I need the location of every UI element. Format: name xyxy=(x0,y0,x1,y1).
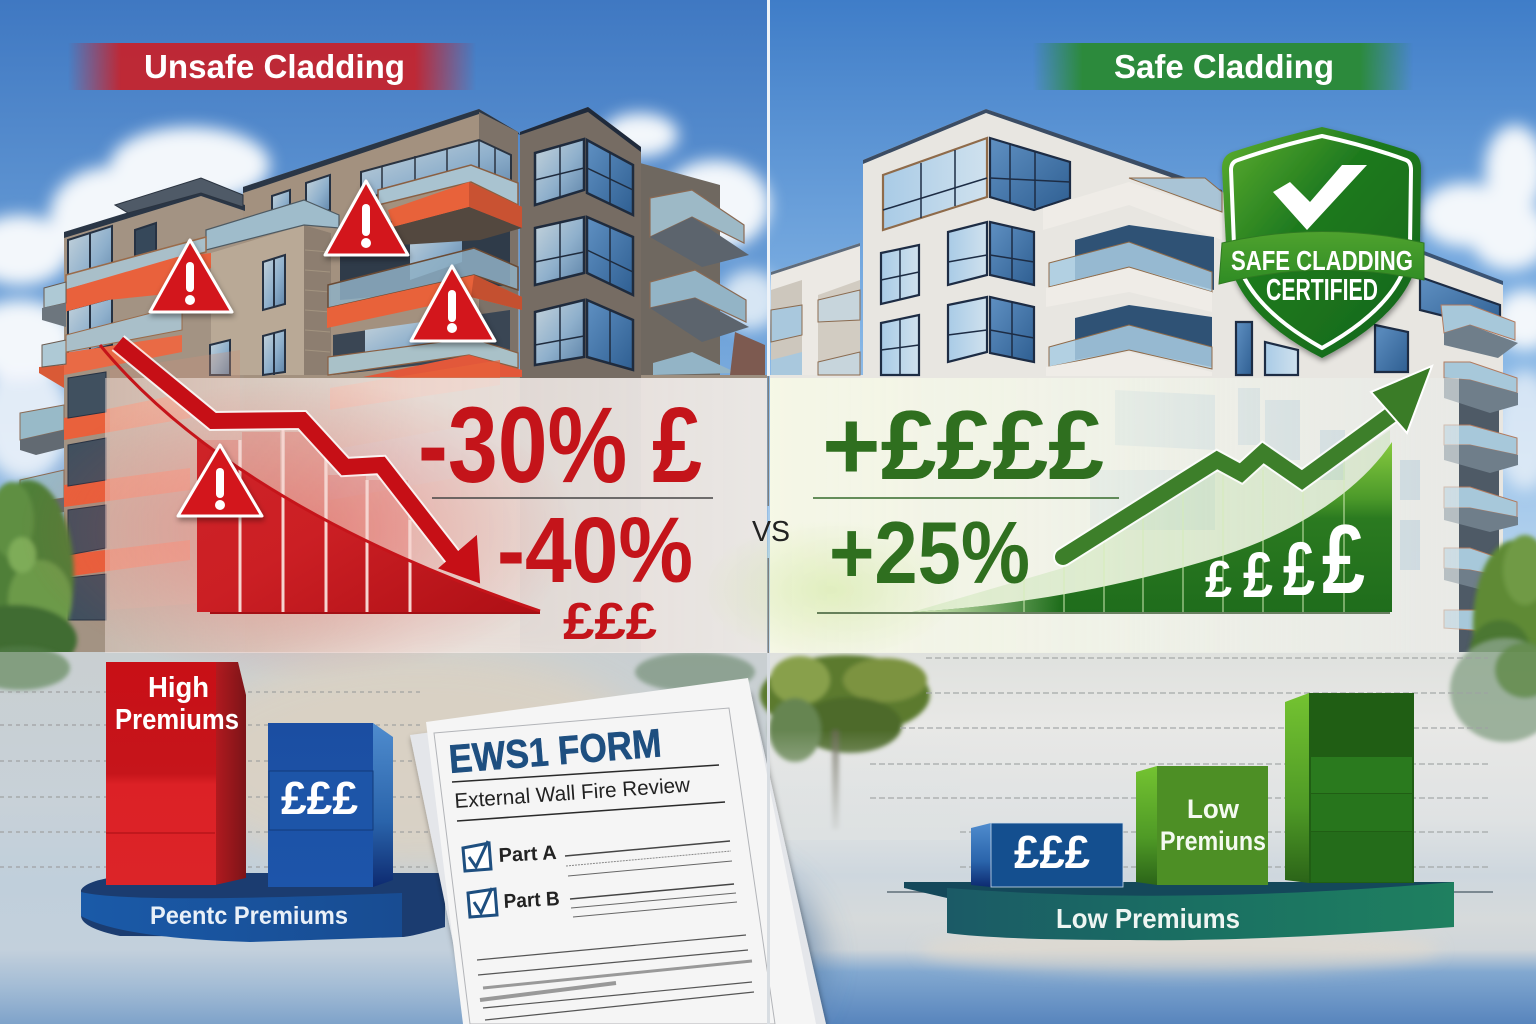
warning icon 4 xyxy=(178,445,262,516)
right dark wall xyxy=(520,107,641,653)
clouds right xyxy=(1420,125,1536,490)
left wing xyxy=(771,243,860,375)
safe building xyxy=(770,109,1518,653)
warning icon 1 xyxy=(150,240,232,312)
ground floor wall behind panel xyxy=(64,375,767,653)
far right balconies xyxy=(1441,305,1518,653)
far right balconies xyxy=(640,163,765,375)
comparison divider bottom xyxy=(767,652,770,1024)
tree: far right xyxy=(1470,535,1536,710)
panel: property value left xyxy=(20,343,767,680)
fine print lines xyxy=(477,935,754,1020)
chart label: ££££: £ xyxy=(1243,539,1273,611)
fog ground right xyxy=(770,652,1536,1024)
red bar: High xyxy=(148,672,209,704)
tree: far left xyxy=(0,480,77,675)
bar chart: low premiums xyxy=(904,693,1454,940)
form heading: EWS1 FORM xyxy=(447,721,663,782)
stat: -30% £: -30% £ xyxy=(418,384,702,505)
chart gridlines left xyxy=(0,692,430,867)
document: EWS1 form xyxy=(410,678,826,1024)
badge: safe cladding certified: SAFE CLADDING xyxy=(1231,245,1413,276)
checklist: part B: Part B xyxy=(503,888,560,913)
center windows xyxy=(361,140,511,200)
fog over right tree xyxy=(770,730,960,840)
left wing wall xyxy=(64,193,245,653)
checklist: part A: Part A xyxy=(498,842,557,867)
vs divider: VS xyxy=(752,516,790,548)
section heading: unsafe cladding: Unsafe Cladding xyxy=(144,48,405,85)
blue bar: £££ xyxy=(1014,826,1090,878)
unsafe building xyxy=(20,107,767,653)
back sheet xyxy=(410,690,826,1024)
section heading: safe cladding: Safe Cladding xyxy=(1114,48,1334,85)
red bar: Premiums xyxy=(115,704,239,736)
tree: center right xyxy=(760,655,930,830)
section heading: unsafe cladding xyxy=(68,43,476,90)
chart label: ££££ xyxy=(1205,504,1365,614)
stat: +££££: +££££ xyxy=(822,390,1104,500)
wing windows xyxy=(68,175,330,375)
shield xyxy=(1222,127,1421,358)
balconies xyxy=(1043,182,1222,240)
badge: safe cladding certified: CERTIFIED xyxy=(1266,272,1378,307)
light strip wall xyxy=(211,225,331,375)
checklist: part A xyxy=(463,841,732,876)
badge: safe cladding certified xyxy=(1219,127,1424,358)
clouds left xyxy=(0,113,780,480)
right sky background xyxy=(768,0,1536,660)
warning icon 3 xyxy=(411,266,495,341)
main white wall xyxy=(770,109,1503,653)
stat: £££: £££ xyxy=(563,593,657,651)
chart label: ££££: £ xyxy=(1322,504,1365,614)
platform xyxy=(904,882,1454,940)
beige haze left xyxy=(180,650,660,870)
left sky background xyxy=(0,0,768,660)
stat: -40%: -40% xyxy=(497,498,693,602)
value drop: bar and area chart xyxy=(100,345,540,613)
chart gridlines right xyxy=(870,658,1488,867)
red bar xyxy=(106,662,246,885)
ribbon xyxy=(1219,232,1424,284)
divider line xyxy=(432,497,713,499)
ground line right xyxy=(887,891,1493,893)
check mark xyxy=(1273,165,1367,230)
tree: center left faint xyxy=(635,652,755,692)
blue bar xyxy=(971,823,1123,887)
faint windows behind panel xyxy=(1090,388,1420,570)
sand haze right xyxy=(920,926,1440,974)
fog ground left xyxy=(0,652,767,1024)
front sheet xyxy=(426,678,816,1024)
platform xyxy=(81,873,445,942)
wing openings xyxy=(771,280,860,375)
chart label: ££££: £ xyxy=(1283,527,1315,612)
checklist: part B xyxy=(468,884,737,917)
value rise: area chart xyxy=(912,430,1392,612)
green bar: Premiuns xyxy=(1160,826,1266,856)
right block windows xyxy=(535,139,633,370)
stat: +25%: +25% xyxy=(829,503,1030,602)
blue bar: £££ xyxy=(281,772,358,824)
center balconies xyxy=(378,165,518,205)
arrow: rising value xyxy=(1063,366,1432,557)
dark green bar xyxy=(1285,693,1414,883)
comparison divider top xyxy=(767,0,770,376)
main tan wall xyxy=(243,109,520,653)
tree: far right foreground fog xyxy=(1450,638,1536,742)
lower floors behind panel xyxy=(20,350,500,620)
dark base glow xyxy=(540,850,820,1024)
platform: Low Premiums xyxy=(1056,903,1240,934)
main windows xyxy=(881,138,1500,375)
green bar xyxy=(1136,766,1268,885)
platform: Peentc Premiums xyxy=(150,902,348,930)
panel: property value right xyxy=(700,366,1459,660)
penthouse xyxy=(115,178,243,213)
upper balcony rail xyxy=(206,200,339,250)
document: EWS1 form: External Wall Fire Review xyxy=(454,774,692,813)
arrow: falling value xyxy=(118,343,479,582)
blue bar xyxy=(268,723,393,887)
divider lines xyxy=(813,498,1390,613)
green bar: Low xyxy=(1187,794,1240,824)
orange balconies left xyxy=(64,253,211,312)
tree: left lower faint xyxy=(0,646,70,690)
bar chart: high premiums xyxy=(81,662,445,942)
warning icon 2 xyxy=(325,181,408,255)
section heading: safe cladding xyxy=(1033,43,1413,90)
chart label: ££££: £ xyxy=(1205,551,1232,609)
